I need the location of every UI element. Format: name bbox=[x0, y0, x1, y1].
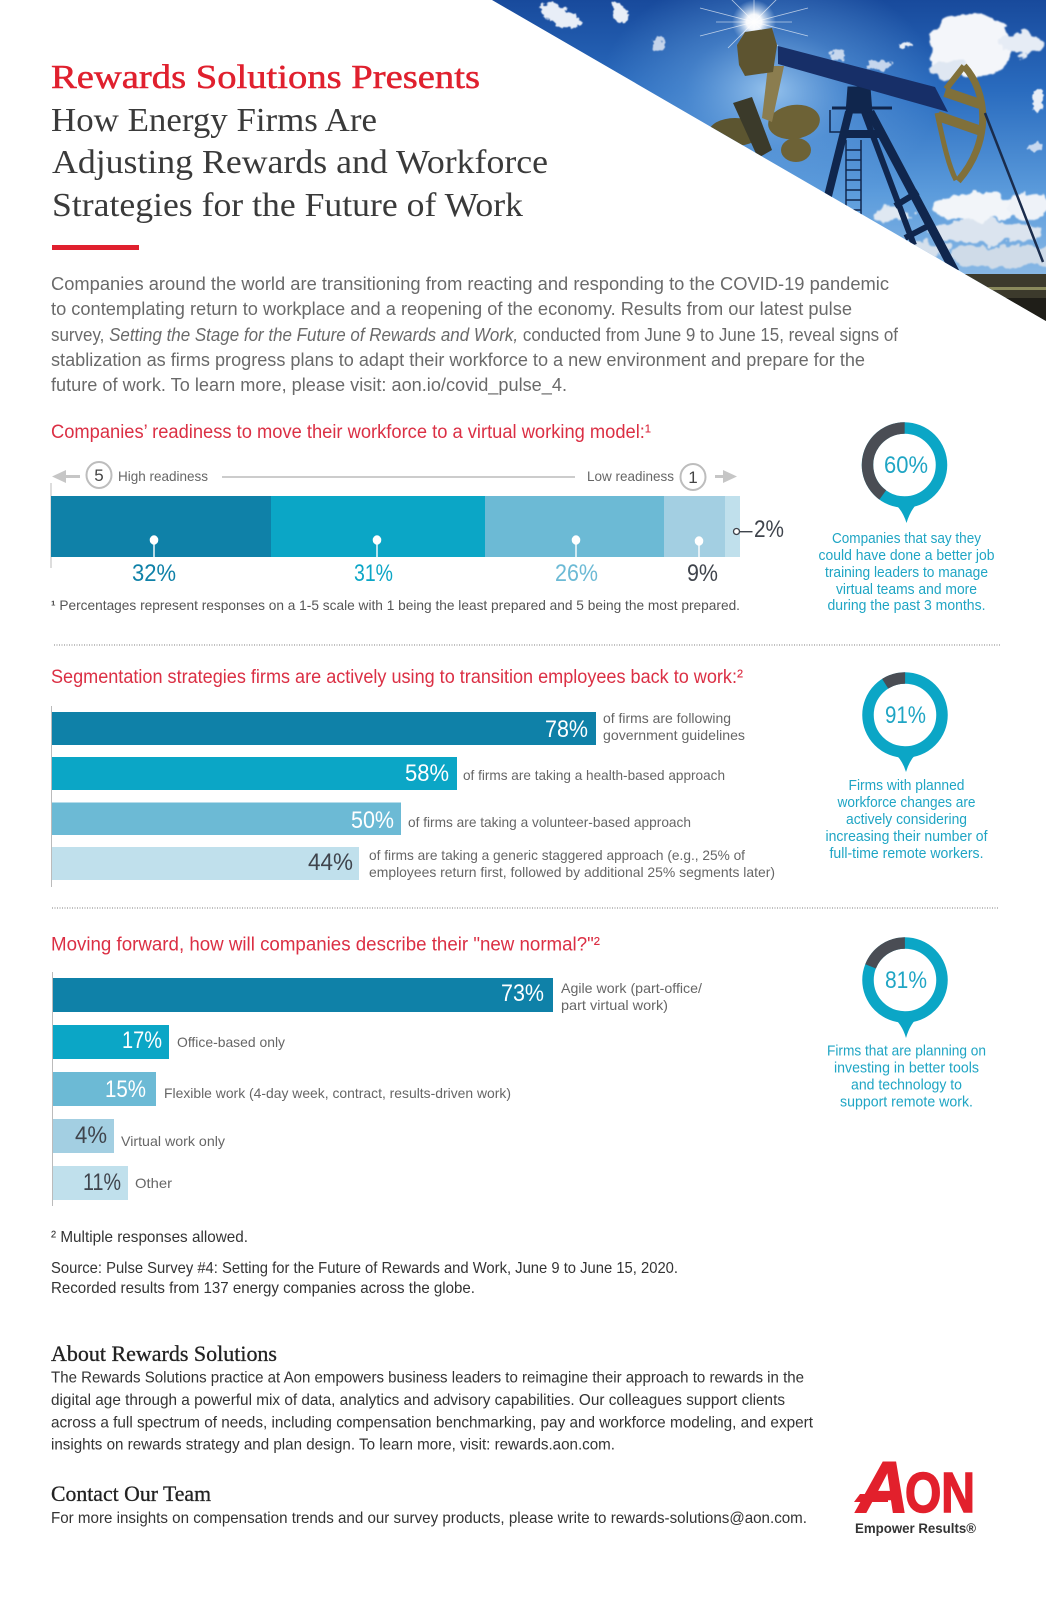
value 2% with connector bbox=[734, 516, 784, 543]
bar 44%: 44% bbox=[308, 849, 353, 876]
cable bbox=[985, 113, 1043, 262]
label 4%: Virtual work only bbox=[121, 1133, 225, 1149]
counterweights bbox=[709, 66, 822, 162]
donut callout 81% bbox=[827, 932, 986, 1110]
label 78% bbox=[603, 710, 745, 743]
Aon logo bbox=[854, 1448, 976, 1536]
label 50%: of firms are taking a volunteer-based approach bbox=[408, 814, 691, 830]
segmentation bar chart bbox=[51, 706, 775, 887]
about paragraph: across a full spectrum of needs, including compensation benchmarking, pay and workforce modeling, and expert bbox=[51, 1414, 814, 1432]
scale 1 badge bbox=[680, 464, 706, 490]
bar 17% bbox=[53, 1025, 169, 1059]
bar 4%: 4% bbox=[75, 1122, 107, 1149]
about heading: About Rewards Solutions bbox=[51, 1341, 277, 1366]
bar 73%: 73% bbox=[501, 980, 544, 1007]
label 78%: of firms are following bbox=[603, 710, 731, 726]
caption: support remote work. bbox=[840, 1094, 973, 1110]
donut callout 91% bbox=[826, 664, 988, 862]
section 2 heading: Segmentation strategies firms are actively using to transition employees back to work:² bbox=[51, 667, 743, 688]
scale 5 badge: 5 bbox=[94, 466, 104, 485]
about paragraph: The Rewards Solutions practice at Aon empowers business leaders to reimagine their approach to rewards in the bbox=[51, 1370, 804, 1386]
caption: actively considering bbox=[846, 812, 967, 828]
ground bbox=[965, 274, 1046, 321]
label 78%: government guidelines bbox=[603, 727, 745, 743]
about paragraph: digital age through a powerful mix of data, analytics and advisory capabilities. Our colleagues support clients bbox=[51, 1392, 785, 1409]
value 9%: 9% bbox=[687, 560, 718, 587]
donut callout 91%: 91% bbox=[885, 702, 926, 729]
value 26%: 26% bbox=[555, 560, 598, 587]
about paragraph bbox=[51, 1370, 814, 1454]
value 2% with connector: 2% bbox=[754, 516, 784, 543]
caption: could have done a better job bbox=[818, 548, 994, 564]
bar 58% bbox=[52, 757, 457, 790]
bar 78% bbox=[52, 712, 596, 745]
high readiness label: High readiness bbox=[118, 468, 208, 484]
contact paragraph: For more insights on compensation trends and our survey products, please write to rewards-solutions@aon.com. bbox=[51, 1510, 807, 1527]
caption: Companies that say they bbox=[832, 531, 982, 547]
scale 1 badge: 1 bbox=[688, 468, 698, 487]
source note: Source: Pulse Survey #4: Setting for the Future of Rewards and Work, June 9 to June 15, 2020. bbox=[51, 1260, 678, 1277]
beam bbox=[778, 46, 948, 112]
horsehead bbox=[937, 66, 984, 181]
new normal bar chart bbox=[52, 972, 702, 1206]
label 73% bbox=[561, 980, 702, 1013]
source note: Recorded results from 137 energy companies across the globe. bbox=[51, 1280, 475, 1297]
label 44%: employees return first, followed by additional 25% segments later) bbox=[369, 864, 775, 880]
bar 15%: 15% bbox=[105, 1076, 146, 1103]
low readiness label: Low readiness bbox=[587, 468, 674, 484]
caption: during the past 3 months. bbox=[828, 598, 986, 614]
sun bbox=[700, 0, 808, 54]
clouds bbox=[873, 14, 1046, 267]
label 44% bbox=[369, 847, 775, 880]
caption: training leaders to manage bbox=[825, 565, 988, 581]
caption: Firms that are planning on bbox=[827, 1044, 986, 1060]
label 17%: Office-based only bbox=[177, 1034, 285, 1050]
caption bbox=[826, 778, 988, 862]
caption: increasing their number of bbox=[826, 829, 988, 845]
donut callout 81%: 81% bbox=[885, 967, 927, 994]
tower bbox=[827, 87, 955, 272]
intro paragraph: future of work. To learn more, please visit: aon.io/covid_pulse_4. bbox=[51, 375, 567, 396]
title line: red: Rewards Solutions Presents bbox=[51, 59, 480, 96]
label 73%: Agile work (part-office/ bbox=[561, 980, 702, 996]
caption bbox=[818, 531, 994, 614]
intro paragraph: to contemplating return to workplace and a reopening of the economy. Results from our latest pulse bbox=[51, 299, 852, 319]
tagline: Empower Results® bbox=[855, 1521, 976, 1536]
label 58%: of firms are taking a health-based approach bbox=[463, 767, 725, 783]
intro paragraph: stablization as firms progress plans to adapt their workforce to a new environment and prepare for the bbox=[51, 350, 865, 370]
section 1 heading: Companies’ readiness to move their workforce to a virtual working model:¹ bbox=[51, 422, 651, 443]
right arrow bbox=[715, 470, 737, 483]
readiness scale bbox=[52, 462, 737, 490]
bar 11%: 11% bbox=[83, 1169, 121, 1196]
footnote 1: ¹ Percentages represent responses on a 1-5 scale with 1 being the least prepared and 5 being the most prepared. bbox=[51, 597, 740, 613]
title bbox=[51, 59, 548, 224]
title line 1: How Energy Firms Are bbox=[51, 102, 377, 139]
stacked readiness bar bbox=[50, 483, 784, 587]
caption bbox=[827, 1044, 986, 1110]
label 44%: of firms are taking a generic staggered approach (e.g., 25% of bbox=[369, 847, 745, 863]
donut callout 60%: 60% bbox=[884, 452, 928, 479]
label 73%: part virtual work) bbox=[561, 997, 668, 1013]
left arrow bbox=[52, 470, 80, 483]
caption: virtual teams and more bbox=[836, 582, 977, 598]
label 15%: Flexible work (4-day week, contract, results-driven work) bbox=[164, 1085, 511, 1101]
caption: full-time remote workers. bbox=[830, 846, 984, 862]
bar 78%: 78% bbox=[545, 716, 588, 743]
Aon logo: A bbox=[855, 1448, 909, 1528]
intro paragraph: survey, Setting the Stage for the Future of Rewards and Work, conducted from June 9 to June 15, reveal signs of bbox=[51, 325, 899, 345]
donut callout 60% bbox=[818, 413, 994, 614]
caption: and technology to bbox=[851, 1078, 962, 1094]
photo: oil pumpjack against blue sky bbox=[480, 0, 1046, 325]
beam head weight bbox=[737, 28, 777, 76]
intro paragraph: Companies around the world are transitioning from reacting and responding to the COVID-19 pandemic bbox=[51, 274, 889, 294]
bar 50%: 50% bbox=[351, 807, 394, 834]
caption: workforce changes are bbox=[837, 795, 976, 811]
about paragraph: insights on rewards strategy and plan design. To learn more, visit: rewards.aon.com. bbox=[51, 1436, 615, 1454]
title line 3: Strategies for the Future of Work bbox=[52, 187, 523, 224]
footnote 2: ² Multiple responses allowed. bbox=[51, 1229, 248, 1246]
value 31%: 31% bbox=[354, 560, 393, 587]
bar 44% bbox=[52, 847, 359, 880]
Aon logo: ON bbox=[905, 1461, 975, 1525]
bar 11% bbox=[53, 1166, 128, 1200]
title line 2: Adjusting Rewards and Workforce bbox=[52, 144, 548, 181]
caption: investing in better tools bbox=[834, 1060, 979, 1076]
scale 5 badge bbox=[86, 462, 112, 488]
bar 4% bbox=[53, 1119, 114, 1153]
section 3 heading: Moving forward, how will companies describe their "new normal?"² bbox=[51, 934, 600, 956]
bar 73% bbox=[53, 978, 553, 1012]
intro paragraph bbox=[51, 274, 899, 396]
bar 58%: 58% bbox=[405, 760, 449, 787]
red title rule bbox=[52, 245, 139, 250]
contact heading: Contact Our Team bbox=[51, 1481, 211, 1506]
source note bbox=[51, 1260, 678, 1297]
bar 15% bbox=[53, 1072, 156, 1106]
caption: Firms with planned bbox=[848, 778, 964, 794]
label 11%: Other bbox=[135, 1175, 172, 1191]
bar 50% bbox=[52, 802, 401, 835]
value 32%: 32% bbox=[132, 560, 176, 587]
bar 17%: 17% bbox=[122, 1027, 162, 1054]
